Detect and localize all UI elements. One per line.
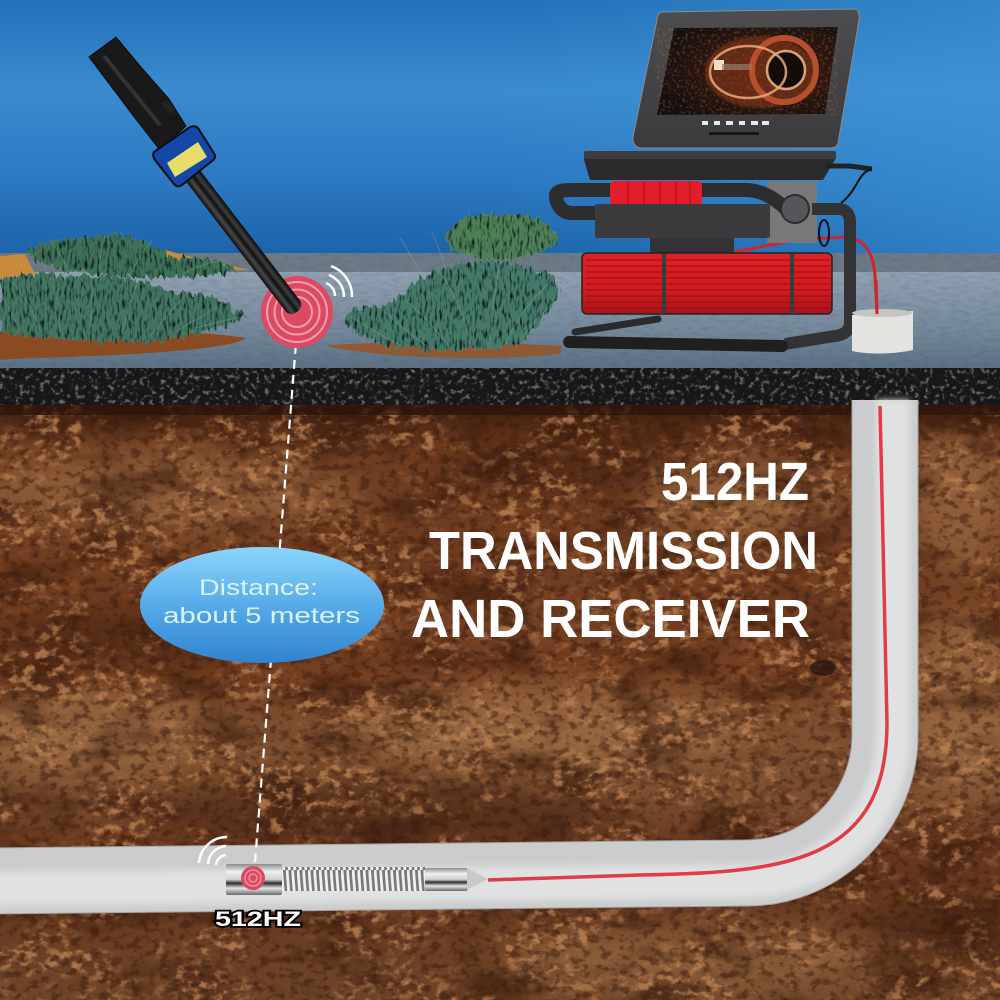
cable into bucket <box>876 280 877 314</box>
red cable to well <box>735 237 877 314</box>
pipe body <box>0 400 885 881</box>
probe head <box>226 864 282 895</box>
panel: vegetation left <box>0 235 250 360</box>
probe signal arcs <box>199 837 227 865</box>
callout text line 1: Distance: <box>199 575 318 600</box>
probe rear <box>425 868 468 891</box>
wand handle <box>89 37 186 150</box>
heading line 2: TRANSMISSION <box>429 521 818 581</box>
carry handle <box>556 190 792 215</box>
sand mound back <box>0 250 250 279</box>
callout: distance <box>140 547 384 663</box>
knob <box>781 195 809 223</box>
base frame <box>569 342 782 346</box>
panel: soil cross-section <box>0 405 1000 1000</box>
target rings <box>261 276 333 348</box>
red cable in pipe <box>488 406 887 880</box>
pipe highlight <box>0 400 893 889</box>
monitor buttons <box>702 121 769 125</box>
underground pipe <box>0 400 893 889</box>
monitor slot <box>709 132 759 135</box>
wand screen <box>167 142 207 177</box>
control box <box>595 204 770 238</box>
power connector and cable <box>826 166 872 169</box>
heading: 512HZ transmission and receiver <box>411 452 818 649</box>
spool straps <box>664 254 792 315</box>
panel: asphalt layer <box>0 368 1000 406</box>
callout oval <box>140 547 384 663</box>
control base <box>584 152 836 180</box>
probe cone <box>467 868 488 890</box>
sand patch front <box>0 329 246 360</box>
red grip <box>610 181 702 205</box>
sand patch <box>325 342 562 358</box>
wand display <box>153 126 215 186</box>
callout text line 2: about 5 meters <box>163 603 360 628</box>
probe target <box>241 866 265 890</box>
grip ribs <box>628 182 690 204</box>
cable spool <box>582 253 832 315</box>
grass blades right <box>350 232 560 348</box>
frequency label: 512HZ <box>215 908 301 931</box>
monitor screen <box>657 27 838 115</box>
burrow hole <box>810 660 836 676</box>
cable loop <box>819 220 829 246</box>
pipe view rings <box>705 36 815 108</box>
wand trigger <box>161 99 176 114</box>
signal target on ground <box>261 266 352 348</box>
dashed locating line <box>255 330 297 862</box>
bush back left <box>26 235 237 278</box>
panel: vegetation right <box>325 214 562 358</box>
receiver wand <box>89 37 304 317</box>
panel: road surface <box>0 253 1000 369</box>
soil base <box>0 405 1000 1000</box>
bucket <box>852 280 913 354</box>
probe spring <box>281 867 427 891</box>
camera probe <box>199 837 488 931</box>
wand rod <box>183 167 304 317</box>
dark soil areas <box>0 445 1000 953</box>
pipe edge <box>0 400 885 881</box>
inspection system <box>556 9 913 354</box>
near road <box>0 272 1000 369</box>
asphalt base <box>0 368 1000 406</box>
sky background <box>0 0 1000 254</box>
spool pedestal <box>650 238 734 256</box>
monitor lid <box>633 9 859 148</box>
light soil areas <box>0 430 1000 990</box>
bush front left <box>0 274 246 342</box>
heading line 3: AND RECEIVER <box>411 589 810 649</box>
support column <box>767 181 817 243</box>
signal arcs <box>326 266 352 297</box>
heading line 1: 512HZ <box>661 452 809 512</box>
bush right large <box>343 262 561 350</box>
right frame <box>785 209 850 344</box>
grass blades left <box>0 236 244 338</box>
far road band <box>0 253 1000 273</box>
bush back <box>445 214 557 260</box>
